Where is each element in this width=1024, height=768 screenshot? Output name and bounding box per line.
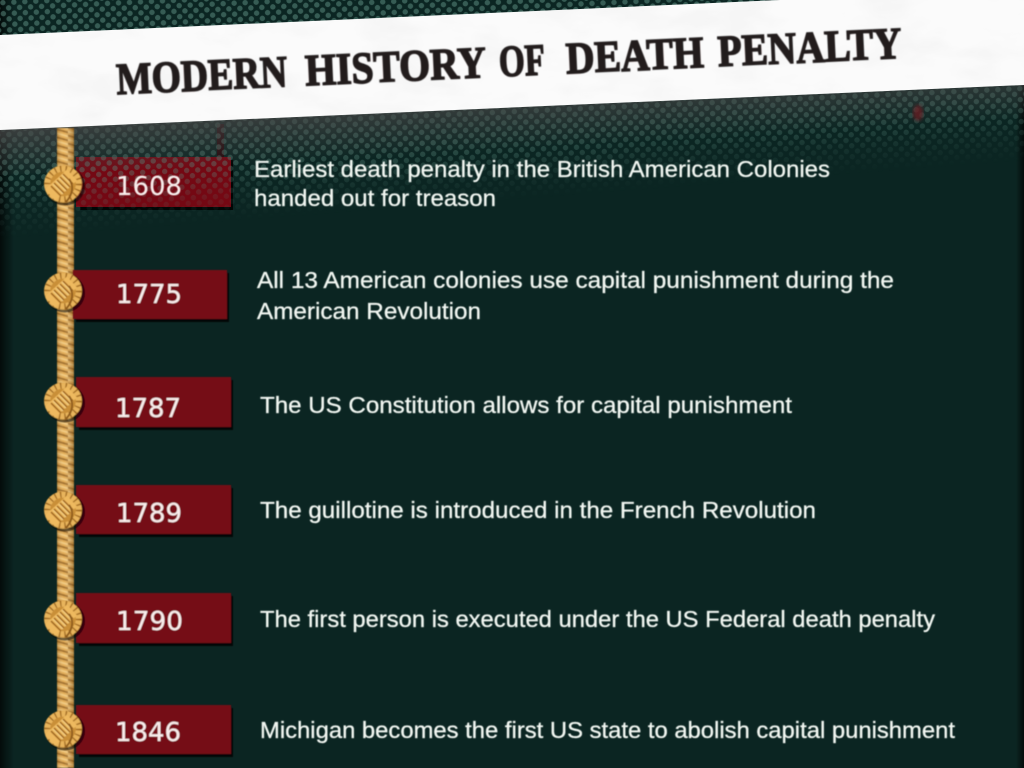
timeline rope [57,128,74,768]
description 1789: The guillotine is introduced in the French Revolution [260,497,816,523]
description 1846: Michigan becomes the first US state to abolish capital punishment [260,717,956,743]
timeline entry: 1789 [44,485,816,537]
title: HISTORY [304,38,487,95]
right edge shadow [1016,0,1024,768]
description 1608: Earliest death penalty in the British American Colonies [254,156,830,182]
year tag 1846 [76,705,233,757]
year label 1608: 1608 [116,172,182,202]
year tag 1790: 1790 [116,607,183,637]
title: DEATH [565,28,705,83]
knot [44,710,85,750]
knot [44,492,85,532]
year tag 1775: 1775 [116,280,182,310]
year tag 1846: 1846 [115,718,181,748]
timeline entry: 1608 [44,156,830,211]
year tag 1608 [76,157,233,210]
halftone dot band [0,0,1024,225]
timeline entry: 1787 [44,377,793,430]
title banner [0,0,1024,130]
year tag 1787 [76,377,233,430]
red stain on halftone [913,105,923,121]
knot [44,600,85,640]
year tag 1789: 1789 [116,499,182,529]
description 1608 [254,156,830,211]
left edge shadow [0,0,14,768]
description 1775: All 13 American colonies use capital punishment during the [257,267,894,293]
knot [44,382,85,422]
year tag 1790 [76,593,233,646]
banner shadow [0,80,1024,175]
title: MODERN [115,47,288,104]
torn paper strip [0,0,1024,130]
title: PENALTY [717,19,903,76]
year tag 1775 [73,270,229,322]
title: OF [498,35,546,86]
timeline entry: 1775 [44,267,894,324]
description 1790: The first person is executed under the US Federal death penalty [260,606,936,632]
description 1775 [257,267,894,324]
knot [44,166,85,206]
timeline entry: 1790 [44,593,936,646]
timeline entry: 1846 [44,705,956,757]
year tag 1789 [76,485,233,537]
description 1787: The US Constitution allows for capital punishment [260,392,793,418]
knot [44,272,85,312]
description 1775: American Revolution [257,298,481,324]
hanging cord stub [217,124,224,158]
title [115,19,903,104]
description 1608: handed out for treason [254,185,496,211]
year tag 1787: 1787 [115,394,181,424]
